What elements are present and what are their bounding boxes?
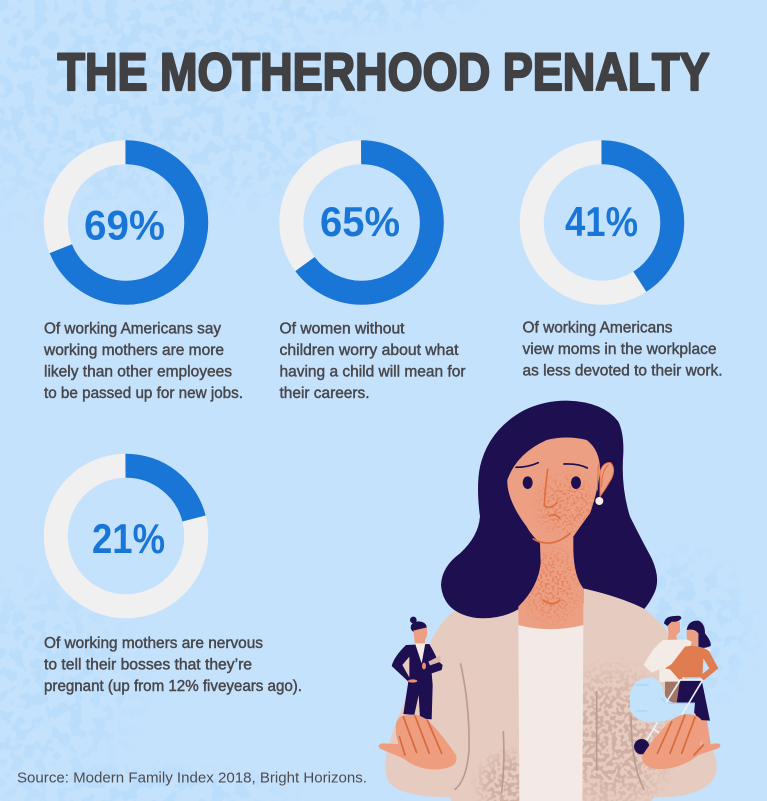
- stroller wheel: [634, 739, 649, 754]
- woman's leg: [702, 718, 711, 748]
- description: [43, 320, 243, 402]
- ear: [600, 463, 614, 497]
- figure: business woman: [392, 617, 443, 719]
- right hand: [642, 714, 720, 769]
- head: [413, 627, 427, 645]
- left arm gap: [402, 657, 409, 677]
- shirt: [518, 625, 583, 801]
- donut chart 65%: [291, 152, 432, 293]
- bun and hair: [410, 617, 427, 633]
- description: to be passed up for new jobs.: [44, 385, 243, 402]
- man's trousers: [665, 682, 680, 703]
- panel: 65 percent: [280, 152, 466, 402]
- woman's skirt: [677, 680, 710, 721]
- hair left lobe: [441, 490, 541, 618]
- stroller handle: [645, 679, 703, 743]
- description: Of women without: [280, 320, 405, 338]
- woman's hair: [687, 621, 711, 648]
- skin stipple: [525, 472, 597, 624]
- hair back: [478, 401, 657, 610]
- value 65%: 65%: [320, 198, 400, 245]
- value 21%: 21%: [92, 515, 165, 562]
- eyes: [523, 476, 581, 489]
- man's hair: [664, 616, 681, 626]
- description: Of working mothers are nervous: [44, 635, 263, 652]
- description: [44, 635, 302, 695]
- panel: 21 percent: [44, 466, 302, 695]
- description: likely than other employees: [44, 364, 232, 380]
- description: having a child will mean for: [280, 364, 466, 380]
- donut chart 21%: [56, 466, 196, 606]
- description: children worry about what: [280, 342, 459, 359]
- value 69%: 69%: [84, 202, 165, 248]
- nose, mouth, jaw and neck lines: [533, 465, 608, 604]
- man's head: [667, 622, 680, 640]
- hands: [379, 714, 720, 769]
- description: to tell their bosses that they’re: [44, 656, 252, 674]
- jacket stipple: [476, 667, 668, 801]
- jacket seams: [455, 664, 644, 793]
- jacket: [385, 588, 717, 801]
- face and neck: [507, 437, 600, 629]
- figure: couple with stroller: [630, 616, 718, 754]
- value 41%: 41%: [565, 198, 638, 245]
- description: their careers.: [280, 385, 370, 402]
- donut chart 41%: [532, 152, 672, 293]
- stroller trim: [637, 685, 693, 711]
- hands: [408, 663, 426, 683]
- description: Of working Americans say: [44, 320, 221, 338]
- description: view moms in the workplace: [522, 341, 716, 358]
- panel: 69 percent: [43, 152, 243, 402]
- stroller body: [630, 677, 695, 723]
- shirt collar: [415, 643, 425, 663]
- woman's sweater: [665, 646, 718, 681]
- facial features: [516, 463, 608, 604]
- left hand: [379, 715, 457, 769]
- woman's head: [687, 630, 698, 648]
- earring: [595, 497, 603, 505]
- donut chart 69%: [56, 152, 196, 293]
- description: as less devoted to their work.: [522, 362, 722, 380]
- description: Of working Americans: [522, 320, 673, 336]
- folder: [428, 656, 441, 665]
- man's sweater: [644, 639, 711, 682]
- description: [522, 320, 722, 380]
- source note: Source: Modern Family Index 2018, Bright Horizons.: [17, 770, 367, 786]
- description: pregnant (up from 12% fiveyears ago).: [44, 678, 302, 695]
- suit: [392, 644, 443, 719]
- description: working mothers are more: [43, 342, 224, 359]
- brows: [516, 463, 587, 468]
- description: [280, 320, 466, 402]
- panel: 41 percent: [522, 152, 722, 380]
- illustration: worried woman: [385, 400, 717, 801]
